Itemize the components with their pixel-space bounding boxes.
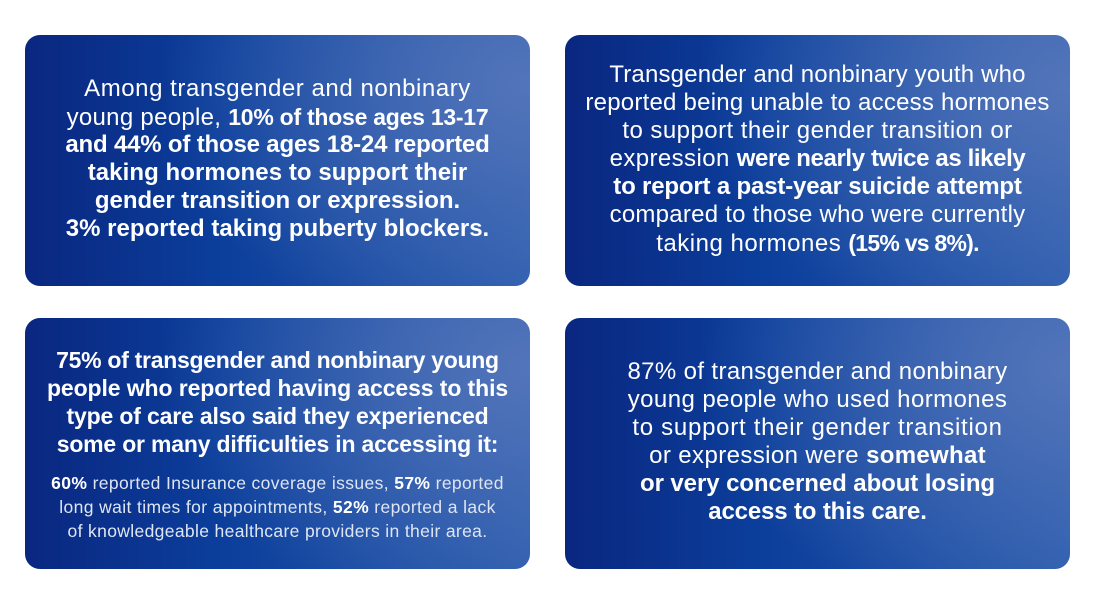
text: hormone use statistics: Among transgender and nonbinary [84,75,471,102]
text: suicide attempt comparison: expression were nearly twice as likely [610,145,1025,172]
panel: concern about losing care [565,318,1070,569]
text: suicide attempt comparison: to report a past-year suicide attempt [613,173,1022,200]
text: suicide attempt comparison: compared to those who were currently [610,201,1025,228]
panel: inability to access hormones and suicide risk [565,35,1070,286]
heading: 75% experienced difficulties: 75% of transgender and nonbinary young [56,347,499,373]
text: hormone use statistics [65,75,490,242]
heading: 75% experienced difficulties: some or many difficulties in accessing it: [57,431,498,457]
text: hormone use statistics: and 44% of those ages 18-24 reported [65,131,490,158]
text: 87% concerned about losing access: access to this care. [708,498,927,525]
text: 87% concerned about losing access: to support their gender transition [632,414,1003,441]
heading: 75% experienced difficulties [47,347,508,457]
text: breakdown of difficulties: long wait times for appointments, 52% reported a lack [59,497,496,517]
panel: hormone and puberty blocker use [25,35,530,286]
text: breakdown of difficulties [51,473,504,541]
text: suicide attempt comparison: taking hormones (15% vs 8%). [656,230,979,257]
heading: 75% experienced difficulties: people who reported having access to this [47,375,508,401]
text: suicide attempt comparison: to support their gender transition or [622,117,1013,144]
text: 87% concerned about losing access: young people who used hormones [628,386,1007,413]
text: hormone use statistics: 3% reported taking puberty blockers. [66,215,489,242]
text: hormone use statistics: young people, 10% of those ages 13-17 [67,104,488,131]
text: suicide attempt comparison: reported being unable to access hormones [585,89,1050,116]
text: breakdown of difficulties: of knowledgeable healthcare providers in their area. [68,521,487,541]
text: suicide attempt comparison: Transgender and nonbinary youth who [609,61,1026,88]
heading: 75% experienced difficulties: type of care also said they experienced [66,403,488,429]
text: suicide attempt comparison [585,61,1050,257]
text: 87% concerned about losing access: or very concerned about losing [640,470,995,497]
text: 87% concerned about losing access: 87% of transgender and nonbinary [627,358,1008,385]
text: breakdown of difficulties: 60% reported Insurance coverage issues, 57% reported [51,473,504,493]
text: hormone use statistics: gender transition or expression. [95,187,460,214]
text: 87% concerned about losing access: or expression were somewhat [649,442,986,469]
text: 87% concerned about losing access [627,358,1008,525]
text: hormone use statistics: taking hormones to support their [88,159,467,186]
panel: difficulties accessing care [25,318,530,569]
